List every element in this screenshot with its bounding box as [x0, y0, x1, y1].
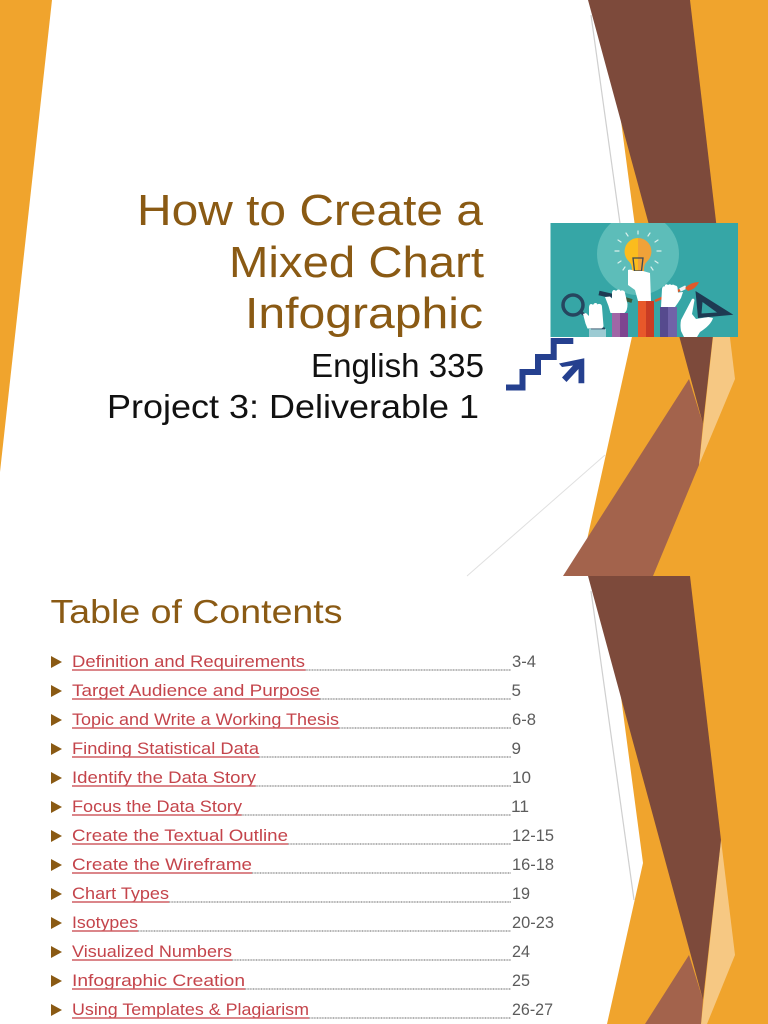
slide 1 right decorative facets	[467, 0, 768, 576]
row: Infographic Creation: 25	[512, 971, 530, 990]
title	[137, 186, 484, 338]
slide 1 left orange wedge	[0, 0, 52, 472]
row: Create the Wireframe: 16-18	[512, 855, 554, 874]
row: Chart Types	[51, 884, 530, 903]
illustration: hands holding creative tools	[550, 213, 738, 337]
subtitle	[107, 347, 484, 425]
row: Isotypes	[51, 913, 554, 932]
title: Mixed Chart	[229, 238, 484, 287]
hands	[583, 270, 713, 337]
row: Visualized Numbers: Visualized Numbers	[72, 942, 232, 961]
icon: stairs	[506, 341, 573, 388]
row: Focus the Data Story: Focus the Data Story	[72, 797, 243, 816]
heading: table of contents: Table of Contents	[50, 593, 342, 630]
subtitle: English 335	[311, 347, 484, 384]
row: Infographic Creation	[51, 971, 530, 990]
row: Infographic Creation: Infographic Creation	[72, 971, 245, 990]
row: Create the Textual Outline	[51, 826, 554, 845]
row: Focus the Data Story	[51, 797, 529, 816]
row: Chart Types: 19	[512, 884, 530, 903]
table of contents list	[51, 652, 554, 1019]
title: Infographic	[245, 289, 483, 338]
row: Create the Wireframe: Create the Wireframe	[72, 855, 252, 874]
icon: marker	[599, 293, 632, 301]
icon: set square	[696, 291, 733, 318]
icon: magnifier	[563, 295, 589, 319]
row: Using Templates & Plagiarism	[51, 1000, 553, 1019]
row: Focus the Data Story: 11	[511, 797, 529, 816]
row: Finding Statistical Data	[51, 739, 521, 758]
row: Topic and Write a Working Thesis	[51, 710, 536, 729]
row: Topic and Write a Working Thesis: Topic and Write a Working Thesis	[72, 710, 339, 729]
row: Visualized Numbers	[51, 942, 530, 961]
row: Create the Textual Outline: 12-15	[512, 826, 554, 845]
slide 2 right decorative facets	[588, 576, 768, 1024]
title: How to Create a	[137, 186, 484, 235]
row: Topic and Write a Working Thesis: 6-8	[512, 710, 536, 729]
sleeves	[589, 301, 677, 337]
icon: up-right arrow	[559, 358, 584, 383]
row: Definition and Requirements: 3-4	[512, 652, 536, 671]
subtitle: Project 3: Deliverable 1	[107, 388, 479, 425]
row: Definition and Requirements	[51, 652, 536, 671]
row: Target Audience and Purpose	[51, 681, 521, 700]
row: Identify the Data Story: Identify the Data Story	[72, 768, 257, 787]
row: Identify the Data Story	[51, 768, 531, 787]
row: Using Templates & Plagiarism: Using Templates & Plagiarism	[72, 1000, 309, 1019]
row: Create the Textual Outline: Create the Textual Outline	[72, 826, 288, 845]
row: Using Templates & Plagiarism: 26-27	[512, 1000, 553, 1019]
icon: paintbrush	[655, 282, 699, 301]
row: Identify the Data Story: 10	[512, 768, 531, 787]
row: Finding Statistical Data: 9	[512, 739, 521, 758]
row: Visualized Numbers: 24	[512, 942, 530, 961]
row: Target Audience and Purpose: 5	[512, 681, 521, 700]
row: Isotypes: 20-23	[512, 913, 554, 932]
row: Definition and Requirements: Definition and Requirements	[72, 652, 305, 671]
row: Isotypes: Isotypes	[72, 913, 138, 932]
icon: light bulb	[615, 231, 661, 278]
row: Finding Statistical Data: Finding Statistical Data	[72, 739, 260, 758]
row: Chart Types: Chart Types	[72, 884, 169, 903]
row: Create the Wireframe	[51, 855, 554, 874]
row: Target Audience and Purpose: Target Audience and Purpose	[72, 681, 320, 700]
